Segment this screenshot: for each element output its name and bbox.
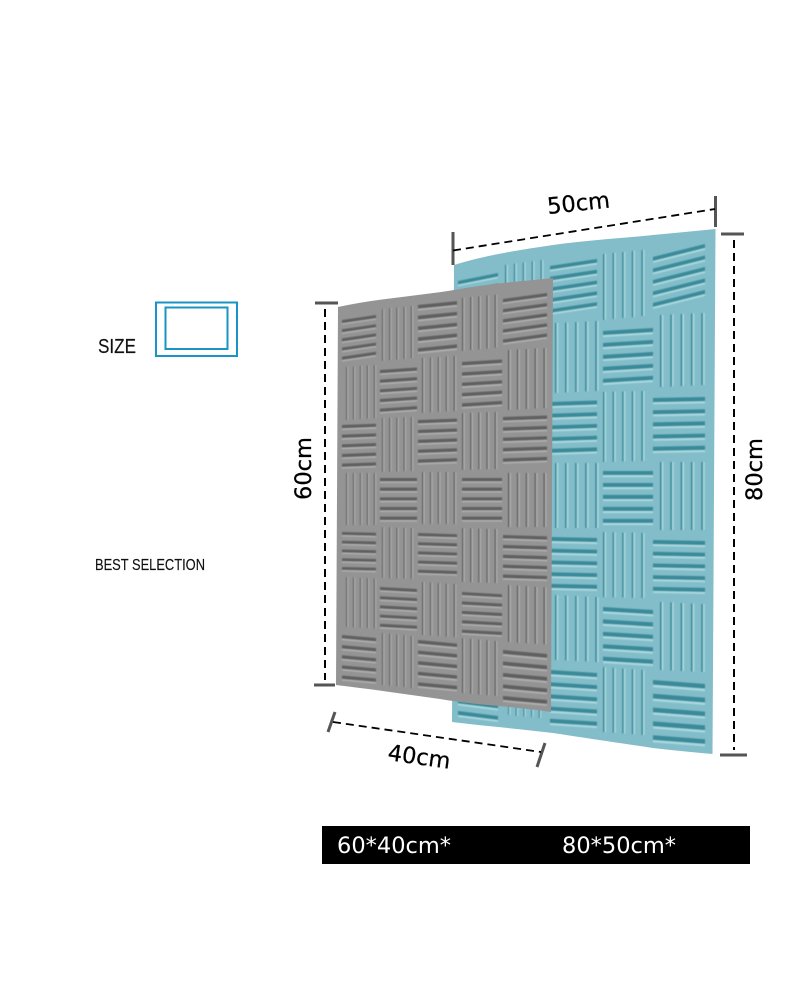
dimension: 60cm: 60cm: [291, 437, 317, 500]
dimension: 60cm: [291, 303, 338, 685]
size legend bar: 80*50cm*: [562, 833, 676, 859]
size legend bar: 60*40cm*: [337, 833, 451, 859]
label: SIZE: SIZE: [98, 336, 136, 358]
icon: nested size rectangles: [156, 302, 237, 356]
dimension: 50cm: 50cm: [546, 188, 611, 220]
dimension: 40cm: [328, 712, 545, 775]
gray mat 60x40cm: [336, 278, 553, 712]
dimension: 40cm: 40cm: [386, 740, 452, 775]
dimension: 80cm: 80cm: [742, 438, 768, 501]
teal mat 80x50cm: [452, 229, 716, 754]
dimension: 80cm: [720, 234, 768, 755]
label: BEST SELECTION: BEST SELECTION: [95, 557, 205, 574]
dimension: 50cm: [453, 188, 716, 265]
size legend bar: [322, 826, 750, 864]
